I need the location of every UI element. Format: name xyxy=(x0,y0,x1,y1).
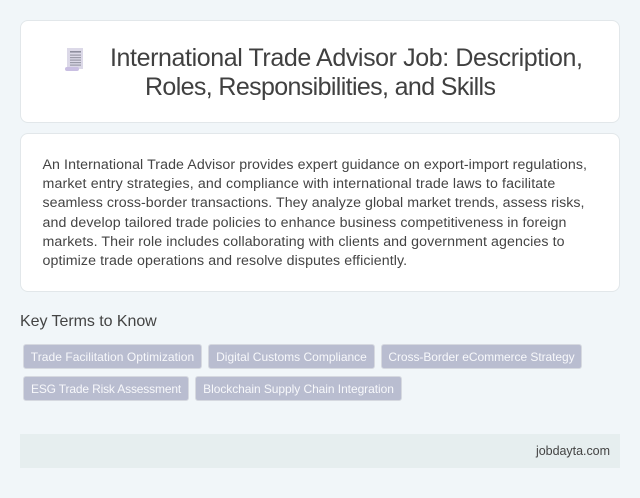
tag: Cross-Border eCommerce Strategy xyxy=(388,350,575,364)
tag: Trade Facilitation Optimization xyxy=(31,350,194,364)
text block: description: seamless cross-border transactions. They analyze global market trends, assess risks, xyxy=(42,195,585,211)
tag: Digital Customs Compliance xyxy=(216,350,367,364)
text block: description: markets. Their role includes collaborating with clients and government agencies to xyxy=(42,234,565,250)
footer bar xyxy=(20,434,620,468)
footer text: jobdayta.com xyxy=(536,444,610,458)
title xyxy=(110,44,583,101)
text block: description: optimize trade operations and resolve disputes efficiently. xyxy=(42,253,407,269)
icon: document scroll xyxy=(65,48,83,71)
panel: description card xyxy=(20,133,620,292)
text block: description xyxy=(42,157,587,269)
text block: description: and develop tailored trade policies to enhance business competitiveness in foreign xyxy=(42,215,566,231)
title: International Trade Advisor Job: Description, xyxy=(110,44,583,72)
text block: description: market entry strategies, and compliance with international trade laws to facilitate xyxy=(42,176,555,192)
tag xyxy=(195,376,402,401)
text block: description: An International Trade Advisor provides expert guidance on export-import regulations, xyxy=(42,157,587,173)
tag: Blockchain Supply Chain Integration xyxy=(203,382,394,396)
panel: title card xyxy=(20,20,620,123)
heading: key terms: Key Terms to Know xyxy=(20,313,157,330)
tag: ESG Trade Risk Assessment xyxy=(31,382,181,396)
tag list xyxy=(23,344,582,401)
tag xyxy=(381,344,582,369)
tag xyxy=(23,376,189,401)
title: Roles, Responsibilities, and Skills xyxy=(145,73,495,101)
tag xyxy=(208,344,375,369)
tag xyxy=(23,344,202,369)
